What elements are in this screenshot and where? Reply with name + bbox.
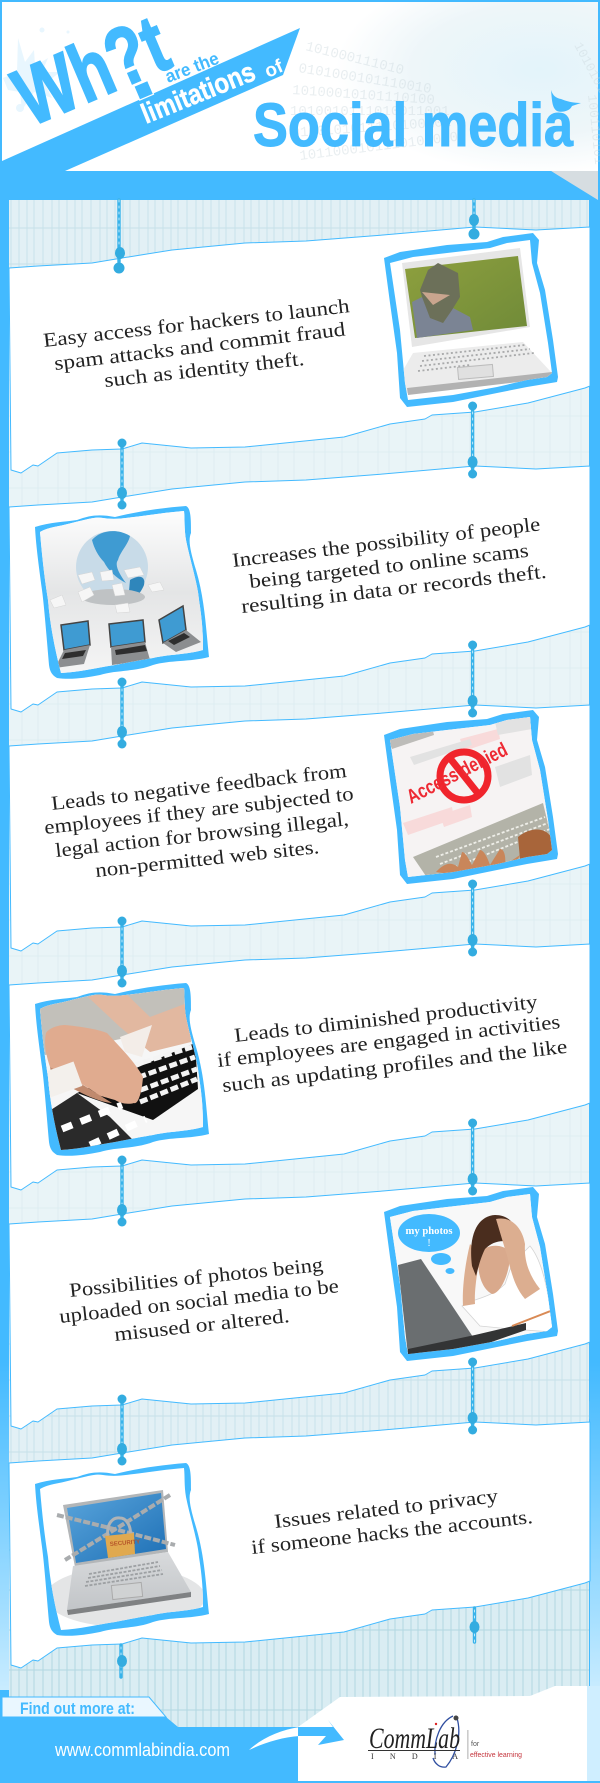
- panel 5 text: uploaded on social media to be: [58, 1275, 340, 1328]
- panel 2 text: Increases the possibility of people: [231, 513, 542, 572]
- panel 2 text: resulting in data or records theft.: [240, 561, 548, 618]
- binary texture: 1010010111010011001: [290, 104, 450, 120]
- binary texture: 1011000101110101010: [299, 130, 459, 165]
- footer blue band: [0, 1717, 300, 1783]
- panel 2 photo: globe and laptops: [35, 505, 209, 680]
- panel 5 text: Possibilities of photos being: [68, 1254, 324, 1302]
- binary texture: [290, 39, 600, 165]
- panel 1 text: spam attacks and commit fraud: [53, 318, 347, 375]
- panel 4 text: such as updating profiles and the like: [221, 1036, 568, 1097]
- panel 4 text: Leads to diminished productivity: [233, 991, 539, 1047]
- title: are the: are the: [162, 48, 222, 87]
- footer label: Find out more at:: [20, 1699, 135, 1718]
- arrow: [249, 1720, 344, 1750]
- footer: [0, 1686, 600, 1783]
- panel 4 text: [216, 991, 568, 1097]
- panel 3 text: [43, 760, 355, 882]
- panel 3 text: employees if they are subjected to: [43, 783, 355, 839]
- right strip: [587, 1686, 600, 1783]
- panel 1 photo: hacker on laptop: [384, 233, 558, 407]
- torn white bands: [9, 227, 590, 1668]
- binary texture: 0101000101110010: [297, 61, 432, 98]
- ropes: [114, 200, 480, 1677]
- footer url: www.commlabindia.com: [54, 1740, 230, 1760]
- panel 6 photo: chained laptop: SECURITY: [110, 1539, 140, 1548]
- icon: bird: [551, 90, 581, 112]
- binary texture: 101000111010: [304, 39, 405, 79]
- logo: CommLab India: effective learning: [470, 1752, 522, 1759]
- logo: CommLab India: I N D I A: [371, 1752, 458, 1761]
- panel 4 photo: typing hands: [35, 982, 209, 1157]
- panel 6 text: if someone hacks the accounts.: [250, 1506, 534, 1559]
- panel 6 text: Issues related to privacy: [273, 1485, 499, 1533]
- find out more tab: [2, 1697, 166, 1717]
- panel 3 photo: access denied: [384, 710, 560, 884]
- panel 1 text: such as identity theft.: [103, 348, 305, 392]
- splat: [3, 28, 70, 112]
- panel 3 text: legal action for browsing illegal,: [54, 808, 350, 862]
- panel 5 text: [58, 1254, 340, 1346]
- panel 1 text: Easy access for hackers to launch: [42, 295, 351, 352]
- panel 3 text: Leads to negative feedback from: [50, 760, 348, 815]
- panel 6 photo: chained laptop: [35, 1463, 209, 1636]
- panel 5 text: misused or altered.: [113, 1305, 291, 1346]
- binary texture: 0100101011110100101: [291, 115, 452, 142]
- header band: [0, 171, 600, 204]
- panel 3 text: non-permitted web sites.: [94, 836, 320, 882]
- title: limitations: limitations: [137, 56, 260, 130]
- logo: CommLab India: [368, 1716, 522, 1767]
- logo: CommLab India: for: [471, 1741, 480, 1748]
- logo: CommLab India: CommLab: [369, 1722, 460, 1755]
- panel 5 photo: worried woman: [384, 1187, 560, 1361]
- panel 4 text: if employees are engaged in activities: [216, 1011, 562, 1072]
- binary texture: 10100010101110100: [292, 83, 435, 109]
- title: of: of: [261, 56, 287, 83]
- title ribbon: [2, 28, 300, 171]
- panel 1 text: [42, 295, 351, 392]
- laptops: [55, 606, 201, 668]
- panel 2 text: [231, 513, 548, 618]
- panel 5 photo: worried woman: !: [427, 1238, 431, 1249]
- panel 6 text: [250, 1485, 534, 1559]
- logo panel: [298, 1686, 587, 1781]
- panel 3 photo: access denied: Access denied: [403, 739, 511, 808]
- header panel: [2, 2, 600, 200]
- panel 2 text: being targeted to online scams: [248, 540, 530, 593]
- panel 5 photo: worried woman: my photos: [406, 1226, 453, 1237]
